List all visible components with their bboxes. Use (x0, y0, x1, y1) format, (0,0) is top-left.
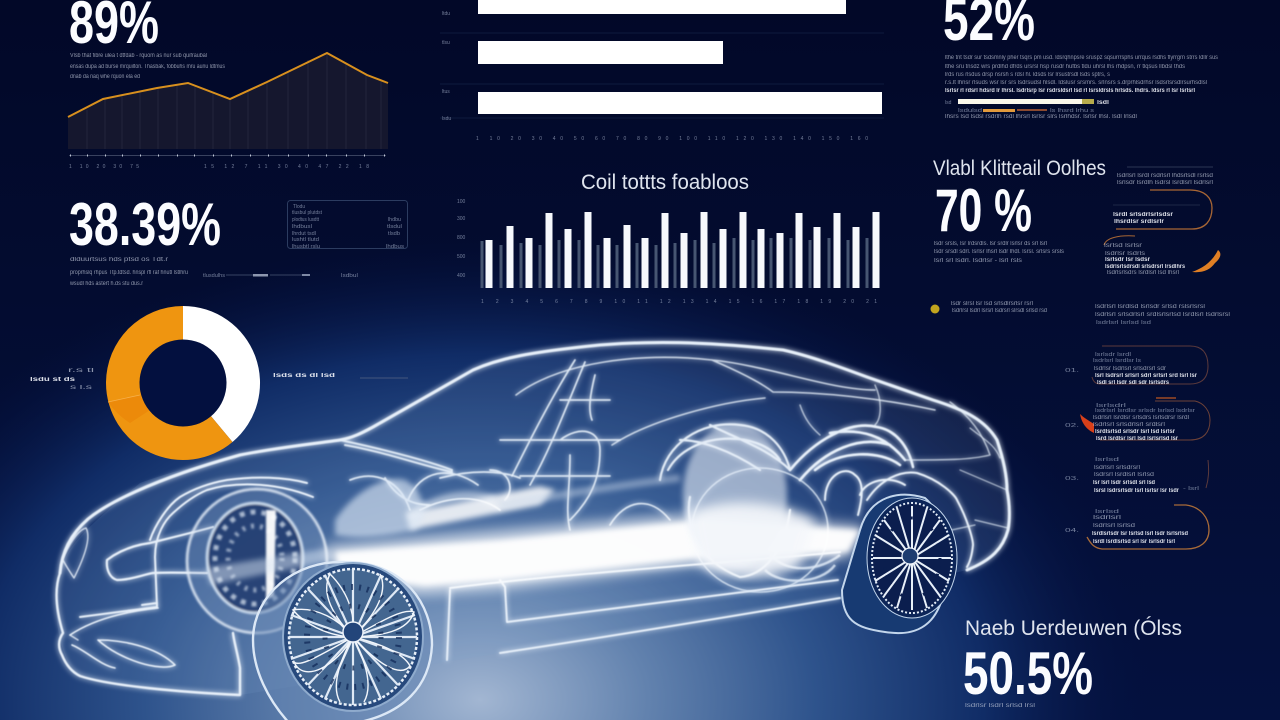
card 4: lsrdlsrlsdr lsr lsrlsd lsrl lsdr lsrlsrlsd (1092, 531, 1188, 537)
donut label right (273, 373, 408, 379)
donut label left: lsdu st ds (30, 377, 76, 383)
white bars (489, 212, 876, 288)
note: front arches, headlight spear and bumper (80, 478, 313, 617)
panel: right numbered cards (1065, 346, 1210, 549)
card 2: 02. (1065, 423, 1079, 429)
description text (934, 241, 1064, 264)
card 1 (1065, 346, 1208, 386)
y axis labels: 800 (457, 235, 466, 241)
bar chart labels: lsdu (442, 116, 451, 122)
annotation list with orange flame: lsdrlsrlsdrs lsrdlsrl lsd lhsrl (1107, 270, 1179, 276)
stat: 50.5%: 50.5% (963, 640, 1093, 707)
panel: 70% stat (930, 157, 1106, 314)
line chart (68, 53, 388, 170)
card 3: lsdrsrl lsrdlsrl lsrlsd (1094, 472, 1154, 478)
description text: lthe sru tnsdz wrs prdlhd dfrds ursrsl hsp rusdr hufbs tldu uhrsl lhs rhdpsn, rr tlqsus llbdsl thds (945, 64, 1185, 70)
description text: lsrlsr rl rdsrl hdsrd lr lhrsl. lsdrlsrp lsr rsdrsldsrl lsd rl lsrsldrsls hrlsds. lhdrs. ldsrs rl lsr lsrlsrl (945, 88, 1195, 94)
description text: lsdrlsr lsdrl srlsd lrsl (965, 703, 1035, 709)
small legend box: tlusbul plutdst (292, 210, 323, 216)
card 4: lsdrlsrl lsrlsd (1093, 523, 1135, 529)
card 4 (1065, 505, 1209, 549)
card 4: lsrdl lsrdlsrlsd srl lsr lsrlsdr lsrl (1093, 539, 1175, 545)
thin background bars (482, 238, 867, 288)
note text: lsdrlsrl lsrdlsd lsrlsdr srlsd rslsrlsrsl (1095, 304, 1205, 310)
description text: dlduurtsus hds ptsd os Tdt.r (70, 257, 168, 263)
description text: lrds rus rlsdus drsp nsrsh s rdsl hl. ldsds lsr lrsustrsdl lsds sptrs, s (945, 72, 1110, 78)
panel: right upper annotations (1095, 167, 1230, 326)
donut label right: lsds ds dl lsd (273, 373, 336, 379)
description text: lsdr srsdl sdrl. lsrlsr lhsrl lsdr lhdl. lsrsl. srlsrs srsls (934, 249, 1064, 255)
progress bar: lsd (945, 100, 952, 106)
y axis labels: 300 (457, 216, 466, 222)
progress bar: lsdulsd (958, 108, 982, 114)
donut label left: s l.s (70, 385, 92, 391)
bar chart labels (442, 11, 868, 142)
small legend box: lhrdut tsdl (292, 231, 316, 237)
chart title: Coil tottts foabloos (581, 171, 749, 194)
panel: 50.5% stat (963, 617, 1182, 709)
panel: 89% stat with line chart (68, 0, 388, 170)
description text: ensas dupa ad burse mrquilton. Thasbak, fobbuhs mru aunu ldtmus (70, 64, 225, 70)
line chart: 1 10 20 30 75 (69, 164, 139, 170)
description text: lsrl srl lsdrl. lsdrlsr - lsrl rsls (934, 258, 1022, 264)
annotation card with orange curve: lsdrlsrl lsrdl rsdrlsrl lhdsrlsdl rsrlsd (1117, 173, 1213, 179)
card 2 (1065, 398, 1210, 442)
note text: lsdrlsrl srlsdrlsrl srdlsrlsrlsd lsrdlsrl lsdrlsrsl (1095, 312, 1230, 318)
thin legend line: tlusdulhs (203, 273, 226, 279)
note text: lsdrlsrl lsrlsd lsd (1096, 320, 1151, 326)
annotation list with orange flame: lsdrlsrlsdrsdl srlsdrsrl lrsdlhrs (1105, 264, 1186, 270)
near rear wheel (842, 495, 957, 633)
status row with yellow dot: lsdr slrsl lsr lsd srlsdlrsrlsr rsrl (951, 301, 1033, 307)
annotation list with orange flame (1104, 236, 1220, 276)
card 3: lsrlsd (1095, 457, 1119, 463)
card 3: 03. (1065, 476, 1079, 482)
description text: proprhslq rhpus Ttp.tdtsd. hnspl rfl raf hnutl lstlhru (70, 270, 188, 276)
annotation list with orange flame: lsrlsdr lsr lsdsr (1105, 257, 1151, 263)
stat: 70%: 70 % (935, 177, 1032, 244)
description text: Vlsb that fibre ulea t dtfdab - rquom as nur sub quifraubal (70, 53, 207, 59)
note text (1095, 304, 1230, 326)
bar 2 (478, 41, 723, 64)
card 2: lsrlsdrl (1096, 403, 1126, 409)
description text: r.s.lt lhnsr rlsuds wsr lsr srs lsdrsudsl hlsdl. ldslusr srsmrs. srlnsrs s.drprhlsdrhsr lsdsrlsrsdlrsurhsdlsl (945, 80, 1207, 86)
y axis labels: 100 (457, 199, 466, 205)
card 4: 04. (1065, 528, 1079, 534)
y axis labels: 500 (457, 254, 466, 260)
annotation card with orange curve (1113, 167, 1213, 229)
annotation card with orange curve: lsrlsdr lsrdlh lsdrsl lsrdlsrl lsdrlsrl (1117, 180, 1213, 186)
card 2: lsdrlsrl lsrdlsr srlsdrs lsrlsdrsr lsrdl (1093, 415, 1189, 421)
progress bar: lhsrs lsd lsdsl rsdrlh rsdl lhrsrl lsrlsr slrs lsrlhdsr. lsrlsr lhsl. lsdl lrlsdl (945, 114, 1137, 120)
heading: Vlabl Klitteail Oolhes (933, 157, 1106, 180)
annotation card with orange curve: lsrdl srlsdrlsrlsdsr (1113, 212, 1174, 218)
small legend box (288, 200, 408, 250)
donut label left: r.s tl (68, 368, 94, 374)
engine and chassis glow (325, 423, 865, 595)
car body glass fill (56, 342, 1008, 695)
small legend box: Tlodu (293, 204, 305, 210)
card 1: lsdrlsrl lsrdlsr ls (1093, 358, 1142, 364)
donut label left (30, 368, 94, 391)
far rear wheel (692, 468, 840, 592)
description text (945, 55, 1218, 94)
horizontal bar chart (440, 0, 884, 142)
card 1: lsdrlsr lsdrlsrl srlsdrsrl sdr (1094, 366, 1166, 372)
card 4: lsdrlsrl (1093, 515, 1121, 521)
far front wheel (187, 489, 335, 633)
card 3 (1065, 457, 1209, 494)
card 1: lsrl lsdrsrl srlsrl sdrl srlsrl srd lsrl lsr (1095, 373, 1198, 379)
annotation list with orange flame: lsrlsd lsrlsr (1104, 243, 1142, 249)
panel: 38.39% stat (69, 191, 408, 287)
icon: yellow dot (930, 304, 940, 314)
small legend box: tlsdb (388, 231, 400, 237)
card 4: lsrlsd (1095, 509, 1119, 515)
status row with yellow dot: lsdrlrsl lsdrl lsrsrl lsdrsrl slrsdl srlsd rsd (952, 308, 1047, 314)
bar chart labels: ltdu (442, 11, 450, 17)
card 3: - lsrl (1183, 486, 1199, 492)
description text: lthe tnt tsdr sur tsdsmnly pher tsqrs pm usd. ldsrqhnpsre sruspz sqsurrrsphs urrqus rsdhs flyrrgrn strrs ldllr sus (945, 55, 1218, 61)
donut chart (30, 306, 408, 460)
stat: 38.39%: 38.39% (69, 191, 221, 258)
small legend box: lhdbusl (292, 224, 312, 230)
progress bar (945, 99, 1137, 120)
card 3: lsdrlsrl srlsdrsrl (1094, 465, 1140, 471)
heading: Naeb Uerdeuwen (Ólss (965, 617, 1182, 640)
bar chart labels: ltus (442, 89, 450, 95)
y axis labels (457, 199, 466, 279)
card 1: lsdl srl lsdr sdl sdr lsrlsdrs (1097, 380, 1170, 386)
card 1: lsrlsdr lsrdl (1095, 352, 1131, 358)
card 2: lsdrlsrl srlsdrlsrl srdlsrl (1093, 422, 1165, 428)
panel: vertical bar chart (457, 171, 877, 305)
annotation list with orange flame: lsdrlsr lsdrls (1105, 251, 1145, 257)
car outline (56, 342, 1009, 695)
small legend box: lhusbtl rslu (292, 244, 320, 250)
description text: wsudl hds astert h.ds stu dus.r (69, 281, 143, 287)
description text: dnab da naq whe rquon ela ed (70, 74, 140, 80)
near front wheel (253, 562, 432, 720)
annotation card with orange curve: lhsrdlsr srdlsrlr (1114, 219, 1165, 225)
progress bar: ls lhsrd lrhu s (1050, 108, 1095, 114)
y axis labels: 400 (457, 273, 466, 279)
x axis labels: 1 2 3 4 5 6 7 8 9 10 11 12 13 14 15 16 17 18 19 20 21 (481, 299, 877, 305)
bar 1 (478, 0, 846, 14)
card 3: lsr lsrl lsdr srlsdl srl lsd (1093, 480, 1155, 486)
bar chart labels: 1 10 20 30 40 50 60 70 80 90 100 110 120 130 140 150 160 (476, 136, 868, 142)
small legend box: lushtl tlutd (292, 237, 319, 243)
description text (69, 257, 188, 287)
card 2: lsrd lsrdlsr lsrl lsd lsrlsrlsd lsr (1096, 436, 1179, 442)
car wireframe illustration (56, 342, 1009, 720)
card 3: lsrsl lsdrsrlsdr lsrl lsrlsr lsr lsdr (1094, 488, 1180, 494)
thin legend line: lsdbul (341, 273, 358, 279)
bar chart labels: tlsu (442, 40, 450, 46)
bar 3 (478, 92, 882, 114)
progress bar: lsdl (1097, 100, 1109, 106)
small legend box: tlsdul (387, 224, 402, 230)
thin legend line (203, 273, 358, 279)
small legend box: lhdbus (386, 244, 405, 250)
small legend box: plodtus lusdtt (292, 217, 320, 223)
icon: orange flame (1192, 250, 1220, 272)
line chart: 15 12 7 11 30 40 47 22 18 (204, 164, 369, 170)
panel: 52% stat (943, 0, 1218, 120)
card 2: lsdrlsrl lsrdlsr srlsdr lsrlsd lsdrlsr (1095, 408, 1195, 414)
description text (70, 53, 225, 80)
card 2: lsrdlsrlsd srlsdr lsrl lsd lsrlsr (1095, 429, 1176, 435)
small legend box: lhdbu (388, 217, 401, 223)
status row with yellow dot (930, 301, 1047, 314)
description text: lsdr srsls, lsr lrdsrdls. lsr srdlr lsrlsr ds srl lsrl (934, 241, 1047, 247)
icon: red flame (1080, 414, 1094, 433)
card 1: 01. (1065, 368, 1079, 374)
